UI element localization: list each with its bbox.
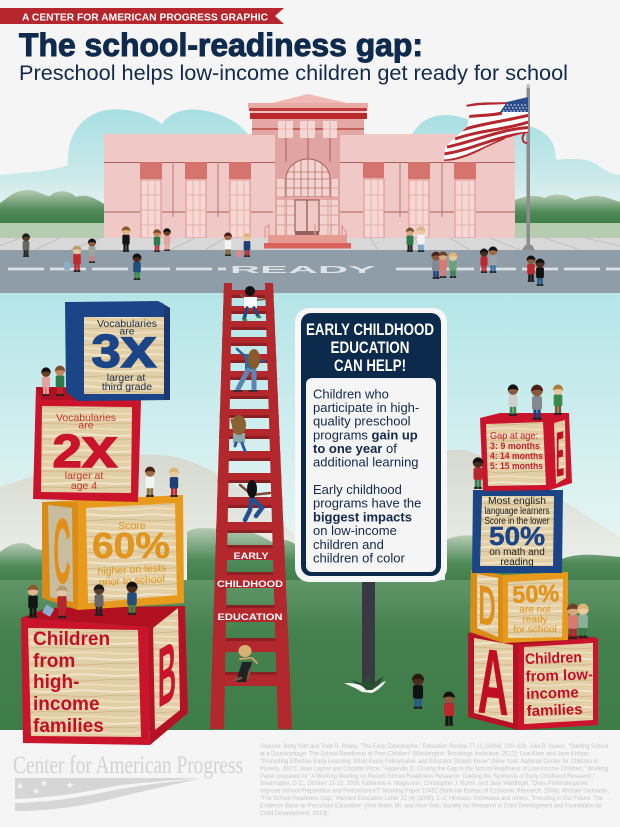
block 2x: vocabularies larger at age 4: larger at: [65, 470, 103, 482]
block A: children from low-income families: [468, 628, 598, 736]
sign post: [362, 582, 375, 685]
blue block: english language learners: Most english: [488, 496, 546, 507]
children on the left stack: [27, 366, 179, 618]
sign body text: programs have the: [313, 496, 421, 511]
block B: children from high-income families: families: [33, 716, 104, 737]
block 2x: vocabularies larger at age 4: [33, 387, 141, 502]
ladder label: EARLY: [234, 551, 269, 562]
ladder label: EDUCATION: [218, 612, 283, 623]
block E: gap at age: E: [556, 417, 564, 491]
block B: children from high-income families: from: [33, 651, 75, 672]
block E: gap at age: [480, 413, 572, 491]
sign body text: on low-income: [313, 523, 397, 538]
block D: 50 percent not ready: for school: [513, 624, 557, 636]
sources: [260, 743, 609, 817]
block C: score 60 percent: 60%: [92, 525, 170, 566]
blue block: english language learners: [472, 490, 563, 573]
block C: score 60 percent: [42, 495, 184, 610]
sign body text: children and: [313, 537, 384, 552]
block 3x: vocabularies larger at third grade: are: [119, 326, 135, 338]
block B: children from high-income families: income: [33, 694, 100, 715]
sign body text: [313, 386, 421, 566]
block 2x: vocabularies larger at age 4: age 4: [71, 480, 97, 492]
sign body text: children of color: [313, 550, 405, 566]
logo flag swoosh: [15, 778, 200, 811]
block B: children from high-income families: Children: [33, 629, 110, 650]
block A: children from low-income families: A: [477, 629, 509, 736]
road: [0, 250, 620, 293]
sign heading: CAN HELP!: [334, 356, 406, 375]
block C: score 60 percent: C: [53, 500, 71, 604]
children on the road: [22, 226, 545, 286]
sign body text: participate in high-: [313, 400, 419, 415]
grass tuft: [344, 674, 386, 693]
header banner: [0, 8, 284, 24]
block D: 50 percent not ready: 50%: [512, 580, 560, 609]
sign heading: EDUCATION: [330, 338, 410, 357]
distant hills: [0, 450, 620, 585]
block A: children from low-income families: from low-: [525, 666, 593, 686]
block 3x: vocabularies larger at third grade: [65, 301, 170, 401]
ladder label: [217, 551, 283, 623]
block 2x: vocabularies larger at age 4: Vocabularies: [56, 412, 116, 424]
block E: gap at age: 3: 9 months: [490, 441, 540, 452]
sign body text: Children who: [313, 386, 389, 401]
block 3x: vocabularies larger at third grade: larger at: [107, 372, 145, 384]
block B: children from high-income families: high-: [33, 672, 79, 693]
block D: 50 percent not ready: ready: [522, 614, 548, 626]
children on the ground: [412, 674, 455, 726]
block 3x: vocabularies larger at third grade: third grade: [102, 381, 152, 393]
school building: [104, 94, 515, 248]
block A: children from low-income families: Children: [525, 649, 582, 668]
block 3x: vocabularies larger at third grade: 3x: [92, 316, 156, 379]
children climbing ladder: [232, 286, 270, 682]
header banner: A CENTER FOR AMERICAN PROGRESS GRAPHIC: [22, 12, 268, 24]
block E: gap at age: 5: 15 months: [490, 461, 543, 472]
sign body text: biggest impacts: [313, 509, 412, 524]
sign: early childhood education can help: [295, 308, 447, 582]
road: READY: [230, 265, 377, 276]
block D: 50 percent not ready: are not: [519, 604, 551, 616]
block C: score 60 percent: higher on tests: [97, 562, 167, 578]
tree line: [0, 190, 620, 238]
block D: 50 percent not ready: [470, 570, 568, 643]
block C: score 60 percent: prior to school: [99, 573, 165, 589]
logo: Center for American Progress: Center for American Progress: [13, 752, 243, 779]
sign body text: programs gain up: [313, 427, 418, 442]
subtitle: Preschool helps low-income children get ready for school: [19, 62, 568, 85]
block A: children from low-income families: income: [526, 684, 579, 703]
ladder: [205, 283, 295, 729]
footer band: [0, 730, 620, 827]
ladder label: CHILDHOOD: [217, 579, 283, 590]
block B: children from high-income families: B: [158, 623, 176, 727]
block E: gap at age: 4: 14 months: [490, 451, 543, 462]
sign heading: EARLY CHILDHOOD: [306, 320, 434, 339]
block E: gap at age: Gap at age:: [490, 430, 538, 442]
blue block: english language learners: 50%: [489, 521, 545, 551]
grass: [0, 580, 620, 730]
block C: score 60 percent: Score: [118, 520, 146, 532]
blue block: english language learners: Score in the lower: [484, 516, 550, 527]
block B: children from high-income families: [21, 606, 188, 745]
clouds behind school: [0, 109, 620, 225]
children on the right stack: [473, 384, 589, 639]
logo: Center for American Progress: [13, 752, 243, 811]
title: The school-readiness gap:: [19, 27, 423, 63]
block A: children from low-income families: families: [526, 701, 583, 720]
background tree line: [0, 528, 620, 582]
sign heading: [306, 320, 434, 375]
block 2x: vocabularies larger at age 4: 2x: [52, 416, 118, 479]
sidewalk: [0, 238, 620, 250]
blue block: english language learners: on math and: [489, 547, 545, 558]
blue block: english language learners: language learners: [484, 506, 550, 517]
sign body text: Early childhood: [313, 482, 402, 497]
sign body text: quality preschool: [313, 414, 411, 429]
block 2x: vocabularies larger at age 4: are: [78, 420, 94, 432]
blue block: english language learners: reading: [500, 557, 534, 568]
sign body text: to one year of: [313, 441, 397, 456]
sources: Child Development, 2013).: [260, 810, 329, 817]
lower panel sky: [0, 293, 620, 583]
block D: 50 percent not ready: D: [478, 574, 496, 640]
flag and pole: [440, 84, 535, 250]
block 3x: vocabularies larger at third grade: Vocabularies: [97, 318, 157, 330]
sign body text: additional learning: [313, 455, 419, 470]
